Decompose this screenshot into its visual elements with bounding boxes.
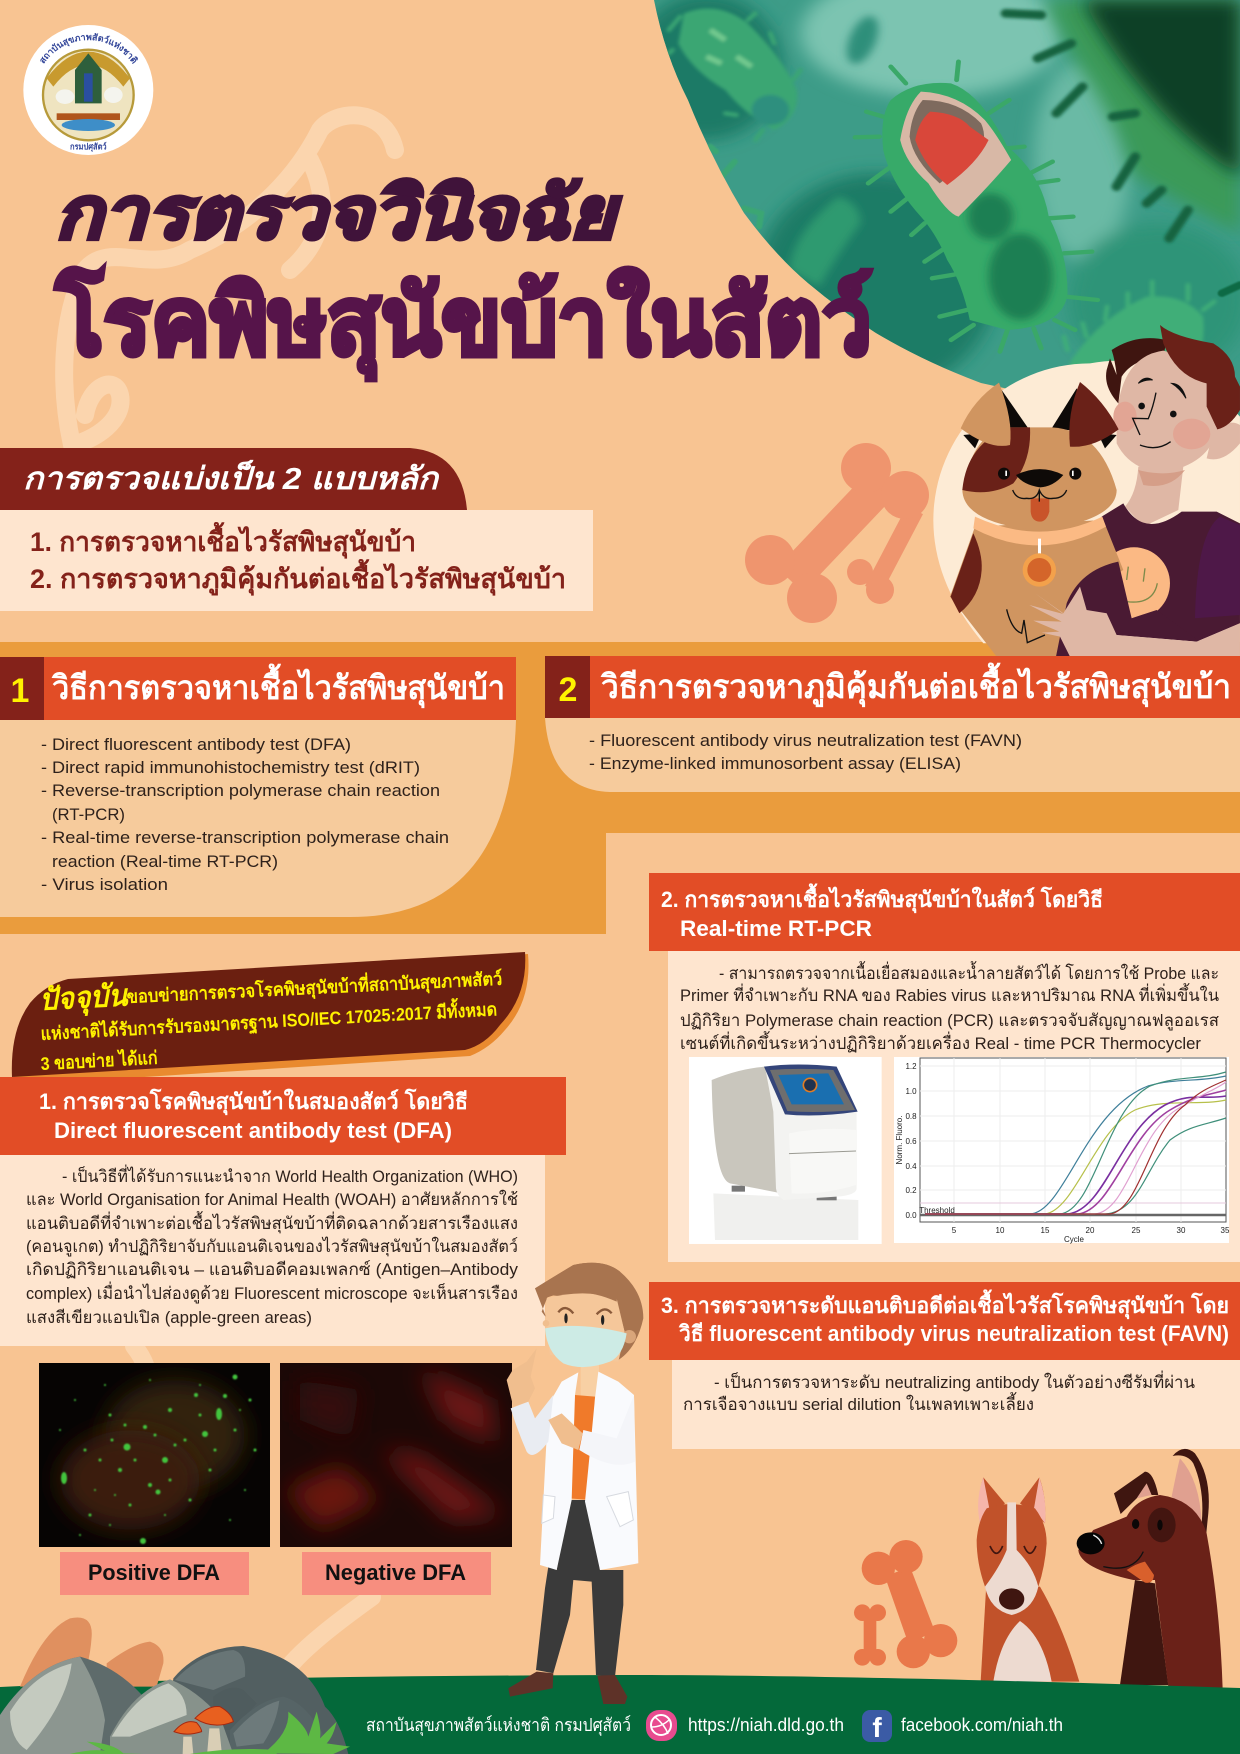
chart axis labels: 20 [1086, 1226, 1095, 1235]
doctor pointing arm [511, 1395, 553, 1455]
section 1 list panel: - Reverse-transcription polymerase chain reaction [41, 781, 440, 800]
positive DFA micrograph [39, 1363, 270, 1547]
method 2 header [649, 873, 1240, 951]
accreditation banner: แห่งชาติได้รับการรับรองมาตรฐาน ISO/IEC 17025:2017 มีทั้งหมด [40, 995, 498, 1046]
footer contact: สถาบันสุขภาพสัตว์แห่งชาติ กรมปศุสัตว์ [366, 1715, 631, 1736]
heading pill: การตรวจแบ่งเป็น 2 แบบหลัก [23, 459, 440, 496]
method 2 description: เซนต์ที่เกิดขึ้นระหว่างปฏิกิริยาด้วยเครื่อง Real - time PCR Thermocycler [680, 1031, 1201, 1053]
negative DFA label [302, 1552, 491, 1595]
chart axis labels: 0.0 [905, 1211, 917, 1220]
main virus [855, 62, 1098, 352]
icon: dribbble [646, 1710, 677, 1741]
orange background mounds [0, 1617, 350, 1754]
method 1 header: Direct fluorescent antibody test (DFA) [54, 1118, 452, 1143]
method 2 header: 2. การตรวจหาเชื้อไวรัสพิษสุนัขบ้าในสัตว์ โดยวิธี [661, 883, 1103, 914]
doctor trousers [536, 1500, 623, 1677]
section 2 list panel [545, 718, 1240, 792]
positive DFA label [60, 1552, 249, 1595]
method 1 description [0, 1155, 545, 1346]
doctor hair [535, 1263, 643, 1360]
chart axis labels: 10 [996, 1226, 1005, 1235]
grass [70, 1712, 350, 1754]
chart axis labels: Cycle [1064, 1235, 1085, 1244]
chart axis labels: 0.6 [905, 1137, 917, 1146]
dog collar [973, 517, 1106, 545]
dark brown dog [1077, 1449, 1223, 1688]
positive DFA label: Positive DFA [88, 1560, 220, 1585]
section 1 list panel: - Real-time reverse-transcription polymerase chain [41, 828, 449, 847]
method 3 description panel: การเจือจางแบบ serial dilution ในเพลทเพาะเลี้ยง [683, 1392, 1034, 1414]
section 1 header: 1 [11, 672, 29, 710]
section 2 header [545, 656, 1240, 718]
man hair back [1106, 338, 1167, 403]
method 3 description panel [672, 1360, 1240, 1449]
section 1 list panel: (RT-PCR) [52, 805, 125, 824]
chart axis labels: 1.0 [905, 1087, 917, 1096]
section 1 list panel: - Virus isolation [41, 875, 168, 894]
dog ears back [963, 388, 1117, 448]
method 3 header [649, 1282, 1240, 1360]
chart axis labels: 5 [952, 1226, 957, 1235]
logo [23, 25, 154, 155]
man ear [1207, 423, 1240, 459]
method 1 description: (คอนจูเกต) ทำปฏิกิริยาจับกับแอนติเจนของไวรัสพิษสุนัขบ้าในสมองสัตว์ [26, 1236, 518, 1257]
lower right virus [1062, 280, 1216, 364]
doctor neck [581, 1365, 599, 1398]
mushrooms [174, 1706, 233, 1754]
chart axis labels: 1.2 [905, 1062, 917, 1071]
footer contact: https://niah.dld.go.th [688, 1715, 844, 1735]
rocks [0, 1646, 348, 1754]
dog nose and tongue [1016, 469, 1063, 487]
large blurred virus [1006, 0, 1240, 238]
method 3 header: 3. การตรวจหาระดับแอนติบอดีต่อเชื้อไวรัสโรคพิษสุนัขบ้า โดย [661, 1289, 1229, 1320]
negative DFA label: Negative DFA [325, 1560, 466, 1585]
dog body [950, 520, 1123, 657]
section 1 header: วิธีการตรวจหาเชื้อไวรัสพิษสุนัขบ้า [52, 663, 505, 709]
heading pill [0, 448, 467, 510]
chart axis labels: 30 [1177, 1226, 1186, 1235]
chart axis labels [895, 1062, 1230, 1244]
method 1 description: เกิดปฏิกิริยาแอนติเจน – แอนติบอดีคอมเพลกซ์ (Antigen–Antibody [26, 1260, 519, 1279]
method 2 description: - สามารถตรวจจากเนื้อเยื่อสมองและน้ำลายสัตว์ได้ โดยการใช้ Probe และ [719, 961, 1219, 983]
decorative leash line [64, 115, 395, 1672]
chart axis labels: 25 [1132, 1226, 1141, 1235]
footer contact [366, 1710, 1063, 1743]
method 2 description panel [668, 951, 1240, 1262]
man arm and hand [1056, 562, 1200, 657]
section 2 list panel: - Enzyme-linked immunosorbent assay (ELISA) [589, 754, 961, 773]
PCR instrument [689, 1057, 882, 1244]
section 1 list panel: reaction (Real-time RT-PCR) [52, 852, 278, 871]
title: โรคพิษสุนัขบ้าในสัตว์ [55, 267, 872, 380]
doctor other arm [579, 1395, 635, 1465]
section 1 list panel [0, 720, 516, 917]
method 1 description: แอนติบอดีที่จำเพาะต่อเชื้อไวรัสพิษสุนัขบ้าที่ติดฉลากด้วยสารเรืองแสง [26, 1211, 518, 1234]
orange band [0, 642, 1240, 934]
accreditation banner: ปัจจุบัน [39, 979, 130, 1019]
doctor other hand [548, 1413, 583, 1450]
chart axis labels: 15 [1041, 1226, 1050, 1235]
virus photo [631, 0, 1240, 450]
white and orange dog [977, 1477, 1079, 1682]
dog head [962, 427, 1117, 531]
method 1 description: complex) เมื่อนำไปส่องดูด้วย Fluorescent microscope จะเห็นสารเรือง [26, 1281, 518, 1304]
method 2 header: Real-time RT-PCR [680, 916, 872, 941]
doctor mask [545, 1326, 627, 1367]
two main types box [0, 510, 593, 611]
doctor illustration [507, 1263, 643, 1704]
amplification chart [894, 1057, 1230, 1244]
method 2 description: ปฏิกิริยา Polymerase chain reaction (PCR) และตรวจจับสัญญาณฟลูออเรส [680, 1011, 1220, 1031]
chart axis labels: 0.4 [905, 1162, 917, 1171]
section 2 header: วิธีการตรวจหาภูมิคุ้มกันต่อเชื้อไวรัสพิษสุนัขบ้า [601, 662, 1231, 708]
left blurred virus [669, 8, 800, 140]
doctor shoes [508, 1672, 627, 1704]
method 2 description [680, 961, 1220, 1053]
chart axis labels: 0.8 [905, 1112, 917, 1121]
doctor pointing hand [507, 1348, 537, 1407]
section 2 list panel: - Fluorescent antibody virus neutralization test (FAVN) [589, 731, 1022, 750]
accreditation banner: ขอบข่ายการตรวจโรคพิษสุนัขบ้าที่สถาบันสุขภาพสัตว์ [126, 966, 503, 1009]
title [55, 174, 872, 380]
chart axis labels: Norm. Fluoro. [895, 1116, 904, 1164]
illustration: man holding dog [933, 325, 1240, 657]
chart axis labels: Threshold [919, 1206, 955, 1215]
bone illustration [745, 443, 929, 623]
lower left blurred virus [789, 197, 861, 287]
doctor coat [540, 1372, 638, 1570]
chart axis labels: 0.2 [905, 1186, 917, 1195]
doctor face [545, 1293, 625, 1362]
section 1 header [0, 657, 516, 720]
section 1 list panel: - Direct fluorescent antibody test (DFA) [41, 735, 351, 754]
icon: facebook [862, 1710, 892, 1743]
method 1 description: - เป็นวิธีที่ได้รับการแนะนำจาก World Health Organization (WHO) [62, 1164, 518, 1186]
doctor shirt [568, 1395, 595, 1500]
two main types box: 2. การตรวจหาภูมิคุ้มกันต่อเชื้อไวรัสพิษสุนัขบ้า [30, 558, 566, 596]
two main types box: 1. การตรวจหาเชื้อไวรัสพิษสุนัขบ้า [30, 521, 416, 559]
method 1 header [0, 1077, 566, 1155]
method 3 description panel: - เป็นการตรวจหาระดับ neutralizing antibody ในตัวอย่างซีรัมที่ผ่าน [714, 1370, 1195, 1392]
man hair front [1160, 325, 1240, 429]
green ground [0, 1675, 1240, 1754]
section 1 list panel: - Direct rapid immunohistochemistry test (dRIT) [41, 758, 420, 777]
accreditation banner: 3 ขอบข่าย ได้แก่ [40, 1047, 158, 1074]
man neck [1125, 467, 1183, 527]
method 1 description: แสงสีเขียวแอปเปิล (apple-green areas) [26, 1308, 312, 1327]
icon: facebook: f [872, 1712, 882, 1743]
bones bottom right [854, 1540, 957, 1668]
negative DFA micrograph [280, 1363, 512, 1547]
accreditation banner [12, 952, 529, 1085]
section 2 header: 2 [559, 671, 577, 709]
method 1 description: และ World Organisation for Animal Health (WOAH) อาศัยหลักการใช้ [26, 1189, 518, 1209]
footer contact: facebook.com/niah.th [901, 1715, 1063, 1735]
man shirt [1102, 503, 1240, 642]
title: การตรวจวินิจฉัย [55, 174, 621, 254]
method 2 description: Primer ที่จำเพาะกับ RNA ของ Rabies virus และหาปริมาณ RNA ที่เพิ่มขึ้นใน [680, 983, 1219, 1005]
logo: กรมปศุสัตว์ [70, 141, 107, 152]
logo text: สถาบันสุขภาพสัตว์แห่งชาติ [40, 33, 138, 64]
man face [1117, 351, 1217, 473]
method 1 header: 1. การตรวจโรคพิษสุนัขบ้าในสมองสัตว์ โดยวิธี [39, 1088, 468, 1116]
chart axis labels: 35 [1221, 1226, 1230, 1235]
